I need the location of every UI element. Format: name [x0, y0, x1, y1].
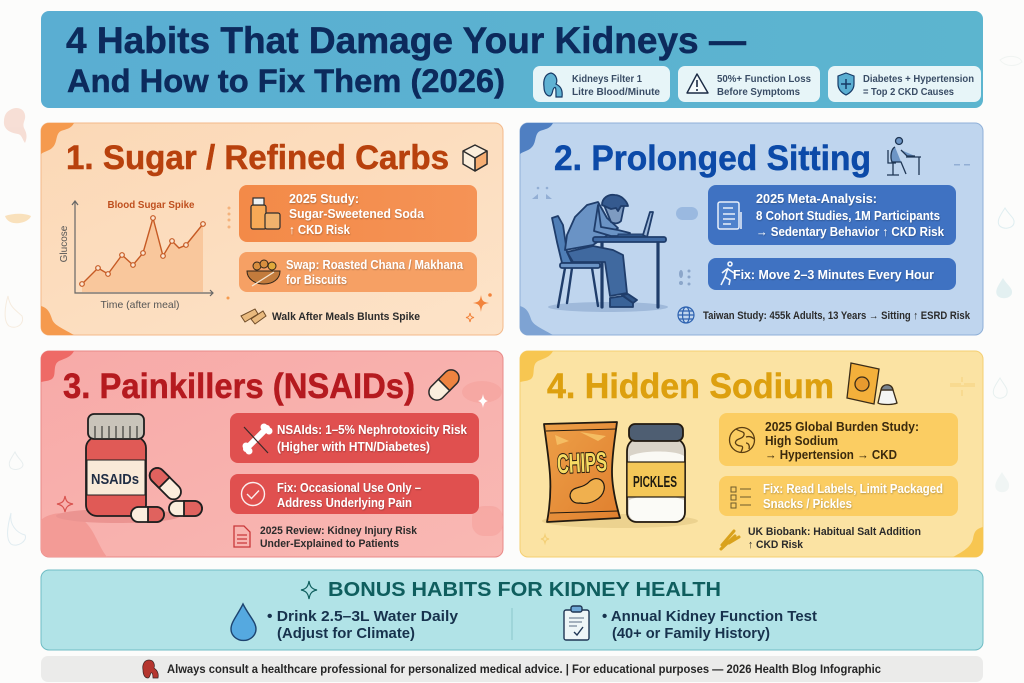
callout: 2025 meta-analysis: 2025 Meta-Analysis: — [756, 192, 877, 206]
icon: sparkle — [57, 496, 73, 512]
decor: faint pills — [462, 381, 503, 536]
panel: 4 hidden sodium — [520, 351, 983, 557]
callout: nephrotoxicity: NSAIds: 1–5% Nephrotoxicity Risk — [277, 423, 467, 437]
chart: blood sugar spike — [59, 199, 213, 311]
icon: kidney — [143, 660, 158, 678]
title — [66, 20, 746, 99]
text: UK Biobank — [748, 526, 921, 551]
icon: clipboard — [564, 606, 589, 640]
decor: sparkle — [541, 377, 975, 543]
footer disclaimer: Always consult a healthcare professional for personalized medical advice. | For educational purposes — 2026 Health Blog Infographic — [167, 662, 881, 676]
icon: kidney — [544, 73, 562, 97]
heading: 1. Sugar / Refined Carbs — [66, 139, 449, 177]
chart: blood sugar spike: Blood Sugar Spike — [108, 199, 195, 211]
title: 4 Habits That Damage Your Kidneys — — [66, 20, 746, 61]
fact pill: diabetes and hypertension — [828, 66, 981, 102]
heading: 4. Hidden Sodium — [547, 367, 834, 406]
icon: sparkle white — [478, 394, 488, 408]
panel: 2 prolonged sitting — [520, 123, 983, 335]
callout: move fix — [708, 258, 956, 290]
chart: blood sugar spike: Glucose — [59, 225, 70, 262]
icon: checklist — [731, 487, 751, 508]
text: water habit: • Drink 2.5–3L Water Daily — [267, 608, 459, 625]
footer disclaimer — [41, 656, 983, 682]
callout: 2025 meta-analysis — [708, 185, 956, 245]
icon: documents — [718, 202, 741, 229]
text: annual test habit — [602, 608, 817, 642]
icon: document — [234, 526, 250, 547]
callout: occasional use fix: Fix: Occasional Use Only – — [277, 481, 421, 495]
icon: earth — [730, 428, 754, 452]
fact pill: kidneys filter — [533, 66, 670, 102]
callout: 2025 meta-analysis: → Sedentary Behavior ↑ CKD Risk — [756, 225, 944, 239]
title: And How to Fix Them (2026) — [67, 63, 505, 99]
divider — [511, 608, 513, 640]
icon: soda bottle and biscuit — [251, 198, 280, 229]
header banner — [41, 11, 983, 108]
icon: sugar cube — [463, 145, 487, 171]
icon: capsule — [426, 367, 462, 403]
icon: sparkle outline — [301, 581, 317, 599]
illustration: chips bag — [542, 422, 698, 528]
text: 2025 review: 2025 Review: Kidney Injury Risk — [260, 525, 418, 537]
icon: warning triangle — [687, 74, 708, 93]
icon: salt sticks — [721, 531, 739, 549]
callout: 2025 study: 2025 Study: — [289, 192, 359, 206]
callout: swap — [239, 252, 477, 292]
fact pill: diabetes and hypertension: = Top 2 CKD Causes — [863, 86, 954, 98]
fact pill: diabetes and hypertension: Diabetes + Hypertension — [863, 73, 974, 85]
callout: read labels fix — [719, 476, 958, 516]
fact pill: kidneys filter: Litre Blood/Minute — [572, 86, 660, 98]
callout: 2025 study: Sugar-Sweetened Soda — [289, 207, 425, 221]
illustration: pickles jar — [627, 424, 685, 522]
callout: nephrotoxicity — [230, 413, 479, 463]
text: walk after meals: Walk After Meals Blunts Spike — [272, 311, 420, 323]
callout: occasional use fix — [230, 474, 479, 514]
decor: footprints — [679, 270, 690, 286]
callout: global burden: High Sodium — [765, 434, 838, 448]
icon: chip bag and salt shaker — [847, 363, 897, 404]
icon: shield — [838, 73, 854, 95]
panel: 1 sugar and refined carbs — [41, 123, 503, 335]
icon: check circle — [242, 482, 264, 506]
text: water habit: (Adjust for Climate) — [277, 625, 415, 642]
decor: small shapes — [532, 164, 970, 199]
heading: 3. Painkillers (NSAIDs) — [63, 367, 415, 406]
illustration: pickles jar: PICKLES — [633, 474, 677, 491]
callout: 2025 meta-analysis: 8 Cohort Studies, 1M Participants — [756, 209, 940, 223]
callout: nephrotoxicity: (Higher with HTN/Diabetes) — [277, 440, 430, 454]
icon: sparkles — [466, 293, 492, 322]
fact pill: function loss: 50%+ Function Loss — [717, 73, 811, 85]
callout: read labels fix: Snacks / Pickles — [763, 497, 852, 511]
heading: BONUS HABITS FOR KIDNEY HEALTH — [328, 578, 721, 601]
fact pill: function loss — [678, 66, 820, 102]
text: annual test habit: (40+ or Family History) — [612, 625, 770, 642]
heading: 2. Prolonged Sitting — [554, 139, 871, 178]
illustration: NSAIDs bottle with pills — [56, 414, 202, 523]
callout: swap: Swap: Roasted Chana / Makhana — [286, 258, 464, 272]
callout: occasional use fix: Address Underlying Pain — [277, 496, 412, 510]
text: water habit — [267, 608, 459, 642]
decor: pill shape — [676, 207, 698, 220]
callout: global burden — [719, 413, 958, 466]
text: UK Biobank: UK Biobank: Habitual Salt Addition — [748, 526, 921, 538]
callout: swap: for Biscuits — [286, 273, 347, 287]
callout: global burden: 2025 Global Burden Study: — [765, 420, 919, 434]
icon: walking person — [721, 262, 734, 285]
illustration: man slumped at laptop — [548, 195, 668, 312]
icon: globe — [678, 307, 694, 323]
text: 2025 review — [260, 525, 418, 550]
panel: 3 painkillers — [41, 351, 503, 557]
illustration: NSAIDs bottle with pills: NSAIDs — [91, 472, 139, 488]
illustration: chips bag: CHIPS — [556, 447, 608, 479]
background decorative icons — [4, 56, 1022, 545]
callout: move fix: Fix: Move 2–3 Minutes Every Hour — [733, 268, 934, 282]
dots decoration — [226, 206, 230, 300]
text: Taiwan study: Taiwan Study: 455k Adults, 13 Years → Sitting ↑ ESRD Risk — [703, 310, 971, 322]
icon: water drop — [231, 604, 256, 640]
panel: bonus habits — [41, 570, 983, 650]
chart: blood sugar spike: Time (after meal) — [100, 299, 180, 311]
callout: 2025 study — [239, 185, 477, 242]
icon: biscuits — [241, 309, 266, 324]
text: annual test habit: • Annual Kidney Function Test — [602, 608, 817, 625]
fact pill: function loss: Before Symptoms — [717, 86, 800, 98]
text: UK Biobank: ↑ CKD Risk — [748, 539, 804, 551]
text: 2025 review: Under-Explained to Patients — [260, 538, 399, 550]
callout: global burden: → Hypertension → CKD — [765, 448, 897, 462]
icon: snack bowl — [247, 260, 280, 286]
callout: 2025 study: ↑ CKD Risk — [289, 223, 350, 237]
icon: person at desk — [887, 138, 921, 175]
fact pill: kidneys filter: Kidneys Filter 1 — [572, 73, 642, 85]
icon: crossed bone — [242, 424, 272, 454]
callout: read labels fix: Fix: Read Labels, Limit Packaged — [763, 482, 943, 496]
